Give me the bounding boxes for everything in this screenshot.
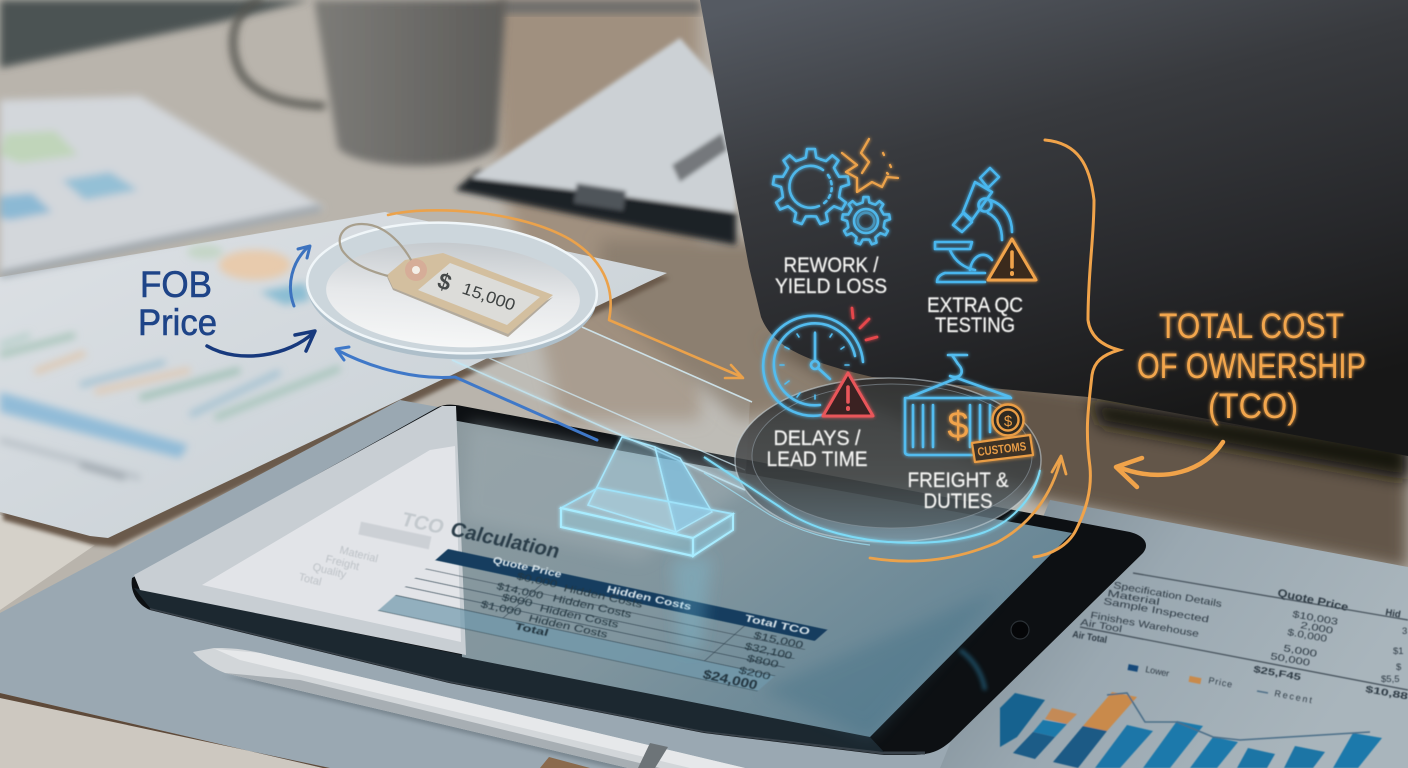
screen glare: Freight <box>324 553 360 573</box>
screen title: Calculation <box>447 518 563 563</box>
mug <box>233 0 506 166</box>
report table: Air Total <box>1071 629 1108 646</box>
icon: large gear <box>772 149 850 226</box>
TCO pointer arrow <box>1116 442 1223 487</box>
report table <box>1071 573 1408 702</box>
right pan <box>704 378 1041 545</box>
label: rework / yield loss: REWORK / <box>784 254 879 277</box>
orange arrow under right pan <box>870 456 1066 561</box>
screen table text: Hidden Costs <box>551 593 633 621</box>
label: extra QC testing: EXTRA QC <box>927 294 1023 317</box>
report table: 50,000 <box>1269 651 1311 669</box>
report table: Specification Details <box>1112 580 1223 610</box>
scale fulcrum <box>561 437 733 650</box>
icon: tablet home button <box>1011 621 1029 639</box>
icon: crack burst <box>842 139 898 192</box>
arrow: small blue upward <box>290 246 310 306</box>
left pan with price tag <box>304 216 600 366</box>
icon: orange warning <box>988 239 1036 280</box>
chart legend <box>1128 664 1313 705</box>
screen table text: $000 <box>500 592 534 609</box>
report table: $.0,000 <box>1286 627 1328 645</box>
icon: clock with alert <box>763 308 877 416</box>
price tag: 15,000 <box>460 280 518 315</box>
label: delays / lead time: LEAD TIME <box>766 448 868 471</box>
price tag <box>340 224 553 337</box>
report table: Quote Price <box>1276 587 1349 614</box>
report table: $10,003 <box>1291 609 1339 628</box>
label: freight and duties <box>908 469 1008 513</box>
report table: 5,000 <box>1282 643 1318 660</box>
clipboard <box>455 38 736 245</box>
paper under tablet <box>0 400 1050 768</box>
arrow: blue from beam back to pan <box>336 347 597 440</box>
icon: red alert rays <box>852 308 877 340</box>
icon: red warning <box>823 373 873 416</box>
FOB price label <box>138 264 217 343</box>
label: delays / lead time: DELAYS / <box>774 427 861 450</box>
tablet <box>132 405 1146 755</box>
label: freight and duties: DUTIES <box>924 490 992 513</box>
label: freight and duties: FREIGHT & <box>908 469 1008 492</box>
report table: Material <box>1106 588 1161 608</box>
icon: rework gears and crack <box>772 139 898 246</box>
icon: shipping container with customs <box>905 355 1033 462</box>
screen table text: $14,000 <box>495 581 545 602</box>
stylus <box>193 648 745 768</box>
report table: Finishes Warehouse <box>1089 610 1200 640</box>
icon: small gear <box>841 197 891 246</box>
screen table text: $32,100 <box>743 641 794 662</box>
tablet bezel <box>132 405 1146 755</box>
holographic balance scale <box>304 216 1041 650</box>
screen table text: Hidden Costs <box>527 613 609 641</box>
right report with table and chart <box>940 500 1408 768</box>
report table: $5,5 <box>1381 674 1400 685</box>
screen table text <box>479 555 811 692</box>
report table: $25,F45 <box>1252 664 1303 683</box>
screen table text: $0,000 <box>515 571 559 591</box>
screen table text: $24,000 <box>701 667 760 692</box>
chart legend: Lower <box>1145 664 1170 679</box>
title: total cost of ownership <box>1137 307 1366 426</box>
report table: Hid <box>1384 607 1402 621</box>
orange beam arrow <box>388 210 743 378</box>
screen title: TCO <box>398 509 447 539</box>
report table: $10,88 <box>1364 684 1408 702</box>
orange bracket <box>1034 140 1119 557</box>
report table: 3 <box>1402 626 1407 637</box>
screen table text: $15,000 <box>752 630 805 651</box>
icon: customs stamp: CUSTOMS <box>977 439 1027 459</box>
report table: 2,000 <box>1299 620 1334 637</box>
arrow: dark blue to FOB pan <box>207 331 315 356</box>
screen table text: Quote Price <box>491 555 564 581</box>
tag string <box>340 224 416 276</box>
FOB price label: Price <box>138 302 217 343</box>
chart legend: Price <box>1208 675 1233 690</box>
label: extra QC testing: TESTING <box>935 314 1015 337</box>
report table: Air Tool <box>1079 617 1123 635</box>
title: total cost of ownership: (TCO) <box>1208 387 1298 426</box>
scale beam <box>452 327 752 490</box>
FOB arrows <box>207 246 597 440</box>
report table: Sample Inspected <box>1102 596 1210 626</box>
price tag value: $ <box>434 267 455 296</box>
screen table text: $1,000 <box>479 599 523 619</box>
screen table text: Total <box>513 621 550 639</box>
report table: $ <box>1396 662 1402 673</box>
tablet screen <box>452 420 1072 737</box>
report table: $1 <box>1393 646 1404 657</box>
label: rework / yield loss <box>775 254 887 298</box>
icon: dollar sign: $ <box>947 405 969 447</box>
screen glare: Quality <box>311 561 348 581</box>
label: rework / yield loss: YIELD LOSS <box>775 275 887 298</box>
screen table text: $200 <box>737 665 772 683</box>
documents: back paper with charts <box>0 96 670 547</box>
chart legend: Recent <box>1274 688 1313 705</box>
screen glare <box>134 406 466 655</box>
screen glare: Material <box>338 544 379 565</box>
screen table text: Total TCO <box>743 613 811 638</box>
bar chart <box>1000 692 1382 768</box>
label: extra QC testing <box>927 294 1023 337</box>
screen table text: Hidden Costs <box>538 603 620 631</box>
screen table text: Hidden Costs <box>605 584 693 613</box>
screen table text: $800 <box>745 653 780 671</box>
screen title <box>398 509 563 563</box>
screen table text: Hidden Costs <box>562 583 644 611</box>
screen glare: Total <box>297 571 323 589</box>
title: total cost of ownership: TOTAL COST <box>1159 307 1344 346</box>
FOB price label: FOB <box>140 264 212 305</box>
icon: microscope with warning <box>935 168 1036 282</box>
laptop <box>700 0 1408 456</box>
icon: dollar coin: $ <box>1004 413 1013 430</box>
screen table <box>378 549 827 691</box>
title: total cost of ownership: OF OWNERSHIP <box>1137 347 1366 386</box>
label: delays / lead time <box>766 427 868 471</box>
